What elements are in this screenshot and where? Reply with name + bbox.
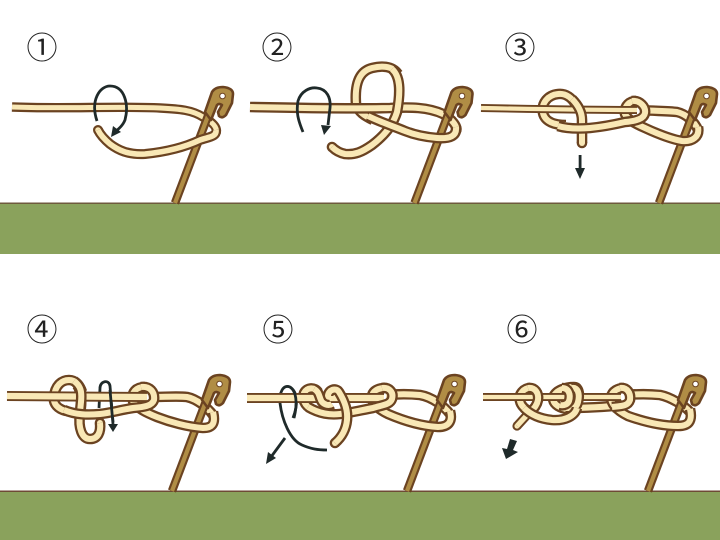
rope: left loop behind standing part [543, 94, 576, 125]
tent peg [172, 375, 230, 491]
tent peg [175, 87, 233, 203]
rope: standing part [7, 396, 147, 397]
rope: top strand to hook [640, 110, 698, 130]
panel: step 5 [247, 313, 465, 491]
step number 3: ③ [504, 31, 536, 66]
rope: standing part [12, 107, 216, 133]
ground band: top row [0, 202, 720, 254]
panel: step 6 [483, 313, 706, 491]
rope: left coils behind standing part [303, 388, 318, 409]
rope: right leg of loop and tail [327, 69, 399, 154]
rope: standing part [483, 393, 621, 401]
arrow: pull direction [266, 438, 285, 464]
rope: return strand and knot ring left [133, 387, 214, 428]
rope: middle strand [564, 405, 622, 408]
step number 4: ④ [26, 313, 58, 348]
tent peg [414, 87, 472, 203]
step number 1: ① [26, 31, 58, 66]
rope: tail [512, 414, 528, 431]
rope: hook return and left of loop [356, 67, 398, 120]
panel: step 4 [7, 313, 230, 491]
panel: step 1 [12, 31, 233, 203]
rope: return strand [368, 116, 456, 138]
rope: second coil and tail [328, 389, 347, 448]
arrow: curve behind rope [280, 386, 327, 450]
rope: return strand and knot ring left [372, 388, 451, 427]
rope: lower strand and knot ring right [308, 388, 392, 414]
arrow: pull down [575, 155, 585, 179]
arrow: curve over rope [290, 387, 296, 418]
rope: hanging hook of working end [77, 385, 105, 439]
rope: standing part [247, 393, 384, 403]
rope: standing part [250, 107, 456, 131]
rope: top strand to hook [150, 397, 213, 415]
tent peg [659, 87, 717, 203]
arrow: behind standing part [99, 382, 113, 422]
arrow: thick pull direction [502, 439, 518, 459]
rope: lower loop strand [524, 408, 577, 420]
step number 5: ⑤ [262, 313, 294, 348]
rope: right of loop re-drawn over standing part [74, 381, 81, 412]
rope: top strand to hook [386, 394, 450, 414]
rope: first half hitch [314, 389, 332, 405]
arrow: pull through [108, 390, 118, 432]
tent peg [648, 375, 706, 491]
rope: knot rings over standing part [528, 388, 630, 412]
arrow: wrap over rope [297, 88, 331, 135]
rope: return strand and knot ring left [611, 388, 691, 426]
step number 6: ⑥ [506, 313, 538, 348]
rope: lower strand and knot ring right [64, 387, 154, 415]
panel: step 3 [481, 31, 717, 203]
rope: lower strand and knot ring right [558, 101, 645, 129]
rope: rings behind standing part [553, 387, 579, 409]
rope: working end [93, 125, 216, 154]
rope: return strand and knot ring left [625, 101, 698, 141]
arrow: wrap around rope [95, 86, 126, 137]
rope: standing part [481, 108, 637, 110]
step number 2: ② [262, 31, 292, 66]
panel: step 2 [250, 31, 472, 203]
tent peg [407, 375, 465, 491]
rope: loop going down to tail [572, 99, 587, 148]
rope: top strand to hook [625, 394, 690, 412]
ground band: bottom row [0, 490, 720, 540]
rope: left loop behind standing part [54, 380, 82, 411]
rope: left ring behind standing part [520, 388, 530, 412]
